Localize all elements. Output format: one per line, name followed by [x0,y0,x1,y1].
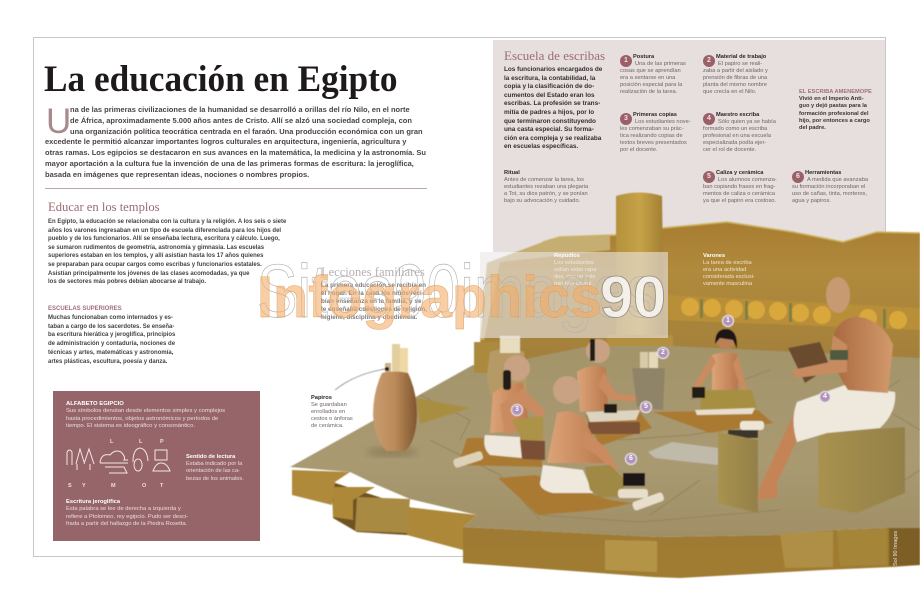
caption 3: primeras copias: tica realizando copias de [620,133,683,139]
text: escuela de escribas: mitía de padres a hijos, por lo [504,109,594,116]
intro text: na de las primeras civilizaciones de la humanidad se desarrolló a orillas del río Nilo, en el norte [70,105,410,114]
text: el escriba amenemope: guo y dejó pastas para la [799,103,867,109]
caption 3: primeras copias: Los estudiantes nove- [635,119,691,125]
text: lecciones familiares: le enseñaba cuestiones de religión, [321,306,427,313]
caption 2: material de trabajo [703,54,768,95]
basket [632,352,665,410]
caption: repudios: Los estudiantes [554,260,594,266]
text: el escriba amenemope: hijo, por entonces a cargo [799,118,870,124]
caption 3: primeras copias: 3 [624,115,628,122]
alfabeto intro: Sus símbolos denotan desde elementos simples y complejos [66,408,225,414]
caption 2: material de trabajo: planta del mismo nombre [703,82,767,88]
caption 1: postura: realización de la tarea. [620,89,677,95]
hieroglyph letters [68,439,164,489]
caption 4: maestro escriba: Sólo quien ya se había [718,119,776,125]
intro text [45,105,426,179]
caption 1: postura [620,54,686,95]
text: escuelas superiores: ESCUELAS SUPERIORES [48,306,122,312]
caption: repudios [554,253,596,287]
title: La educación en Egipto [44,58,398,100]
caption: papiros: Se guardaban [311,402,347,408]
caption 5: caliza y ceramica: 5 [707,173,711,180]
hieroglyphs [66,448,171,474]
caption 3: primeras copias: Primeras copias [633,112,677,118]
sentido de lectura: bezas de los animales. [186,476,244,482]
alfabeto intro: hasta procedimientos, objetos astronómicos y períodos de [66,416,218,422]
marker numbers: 2 [661,349,665,356]
caption 6: herramientas [792,170,868,204]
panel: alfabeto egipcio: M [111,483,116,489]
panel: alfabeto egipcio: L [139,439,142,445]
watermark panel [480,252,668,338]
mats [458,410,773,515]
caption 6: herramientas: agua y papiros. [792,198,831,204]
text: educar en los templos: años los varones ingresaban en un tipo de escuela diferenciada para los hijos del [48,228,281,234]
caption: repudios: solían estar rapa [554,267,596,273]
text: lecciones familiares: La primera educación se recibía en [321,282,426,289]
caption 2: material de trabajo: zaba a partir del aislado y [703,68,768,74]
caption 4: maestro escriba: profesional en una escuela [703,133,771,139]
caption 5: caliza y ceramica: Caliza y cerámica [716,170,763,176]
caption 2: material de trabajo: 2 [707,57,711,64]
text: el escriba amenemope: del padre. [799,125,826,131]
caption 2: material de trabajo: Material de trabajo [716,54,766,60]
caption: ritual: Antes de comenzar la tarea, los [504,177,584,183]
marker numbers: 3 [515,406,519,413]
text: escuelas superiores: técnicas y artes, matemáticas y astronomía, [48,350,173,356]
text: escuela de escribas: una casta especial. Su forma- [504,126,594,133]
panel: escuela de escribas [493,40,885,252]
sentido de lectura: Sentido de lectura [186,454,235,460]
marker numbers: 5 [644,403,648,410]
scribe 1 [690,329,757,415]
text: el escriba amenemope [799,89,872,131]
text: escuelas superiores: artes plásticas, escultura, poesía y danza. [48,359,167,365]
callout markers [512,316,830,464]
text: escuela de escribas: que terminaron constituyendo [504,118,596,125]
alfabeto intro [66,401,225,429]
caption: papiros: enrollados en [311,409,345,415]
escritura jeroglifica [66,499,188,527]
text: escuelas superiores [48,306,176,365]
caption: papiros [311,395,353,429]
panel: alfabeto egipcio: S [68,483,72,489]
caption 2: material de trabajo: El papiro se reali- [718,61,762,67]
escritura jeroglifica: Esta palabra se lee de derecha a izquierda y [66,506,181,512]
text: lecciones familiares: Lecciones familiares [321,265,425,279]
watermark: Infographics [257,265,602,330]
text: lecciones familiares: higiene, disciplina y obediencia. [321,314,417,321]
text: escuela de escribas [504,66,602,150]
text: educar en los templos: se preparaban para ocupar cargos como escribas y funcionarios estatales. [48,262,262,268]
caption 1: postura: Una de las primeras [635,61,686,67]
caption: repudios: Repudios [554,253,580,259]
caption 4: maestro escriba: especializada podía ejer- [703,140,766,146]
scribe 5 [577,339,640,434]
caption: varones: La tarea de escriba [703,260,752,266]
panel: alfabeto egipcio: O [142,483,146,489]
marker numbers: 1 [726,317,730,324]
text: escuela de escribas: escribas. La profesión se trans- [504,100,600,107]
caption: varones: vamente masculina [703,281,752,287]
caption 3: primeras copias: textos breves presentados [620,140,687,146]
text: escuelas superiores: Muchas funcionaban como internados y es- [48,315,173,321]
caption: papiros: cestos o ánforas [311,416,353,422]
caption: ritual: a Tot, su dios patrón, y se ponían [504,191,588,197]
text: escuelas superiores: ba escritura hierática y jeroglífica, principios [48,332,175,338]
intro text: una organización política teocrática centrada en el faraón. Una producción económica con un gran [70,127,423,136]
caption: varones: Varones [703,253,725,259]
intro text: de África, aproximadamente 5.000 años antes de Cristo. Allí se alzó una sociedad compleja, con [70,116,412,125]
text: escuela de escribas: cumentos del Estado eran los [504,92,595,99]
caption 4: maestro escriba [703,112,776,153]
text: el escriba amenemope: Vivió en el Imperio Anti- [799,96,863,102]
text: lecciones familiares [321,265,427,321]
marker numbers: 4 [823,393,827,400]
caption 3: primeras copias: por el docente. [620,147,658,153]
back wall [480,222,920,360]
caption: repudios: dos, con un solo [554,274,595,280]
heading: escuela de escribas: Escuela de escribas [504,48,605,63]
caption 5: caliza y ceramica: ban copiando frases en frag- [703,184,775,190]
caption 5: caliza y ceramica [703,170,777,204]
caption 6: herramientas: A medida que avanzaba [807,177,868,183]
low block and rear jar [474,336,527,412]
intro text: basada en imágenes que representan ideas, nociones o nombres propios. [45,170,309,179]
sentido de lectura: Estaba indicado por la [186,461,242,467]
caption: papiros: Papiros [311,395,332,401]
caption 5: caliza y ceramica: Los alumnos comenza- [718,177,777,183]
drop cap: U [46,102,71,141]
caption: ritual: bajo su advocación y cuidado. [504,198,580,204]
caption: repudios: mechón lateral. [554,281,593,287]
caption: papiros: de cerámica. [311,423,344,429]
panel: alfabeto egipcio: T [160,483,163,489]
caption 1: postura: Postura [633,54,654,60]
caption 6: herramientas: 6 [796,173,800,180]
text: escuela de escribas: Los funcionarios encargados de [504,66,602,73]
text: escuela de escribas: ción era compleja y se realizaba [504,135,601,142]
caption 1: postura: 1 [624,57,628,64]
text: educar en los templos: superiores estaban en los templos, y allí asistían hasta los 17 años quienes [48,253,263,259]
text: lecciones familiares: bían enseñanza en la familia, y se [321,298,421,305]
panel: alfabeto egipcio: P [160,439,164,445]
watermark: 90 [600,265,666,330]
caption 6: herramientas: uso de cañas, tinta, morteros, [792,191,867,197]
panel: alfabeto egipcio: L [110,439,113,445]
white cloth and scrolls [648,421,764,465]
sentido de lectura: orientación de las ca- [186,468,240,474]
caption 4: maestro escriba: formado como un escriba [703,126,767,132]
caption 5: caliza y ceramica: mentos de caliza o cerámica [703,191,775,197]
text: el escriba amenemope: EL ESCRIBA AMENEMOPE [799,89,872,95]
escritura jeroglifica: Escritura jeroglífica [66,499,120,505]
divider [45,188,427,189]
text: educar en los templos: Asistían principalmente los jóvenes de las clases acomodadas, ya que [48,271,249,277]
caption: ritual [504,170,588,204]
text: educar en los templos [48,218,286,285]
teacher on stone seat [757,277,905,513]
text: escuela de escribas: en escuelas específicas. [504,143,578,150]
caption: varones: era una actividad [703,267,746,273]
text: educar en los templos: pueblo y de los funcionarios. Allí se enseñaba lectura, escritura y cálculo. Luego, [48,236,280,242]
caption: ritual: estudiantes rezaban una plegaria [504,184,588,190]
caption 6: herramientas: su formación incorporaban el [792,184,865,190]
escritura jeroglifica: refiere a Ptolomeo, rey egipcio. Pudo ser desci- [66,514,188,520]
sentido de lectura [186,454,244,482]
caption 4: maestro escriba: 4 [707,115,711,122]
text: educar en los templos: se sumaron rudimentos de geometría, astronomía y gimnasia. Las escuelas [48,245,264,251]
scribe 6 [540,376,665,511]
caption 3: primeras copias [620,112,691,153]
caption 6: herramientas: Herramientas [805,170,841,176]
text: escuela de escribas: la escritura, la contabilidad, la [504,75,595,82]
caption 5: caliza y ceramica: ya que el papiro era costoso. [703,198,776,204]
small stone block [718,432,758,513]
image credit: Sol 90 Images [893,531,899,566]
jar with papyrus scrolls [366,344,418,456]
intro text: otras ramas. Los egipcios se destacaron en sus avances en la matemática, la medicina y la astronomía. Su [45,148,426,157]
text: educar en los templos: los de sectores más pobres debían abocarse al trabajo. [48,279,206,285]
caption: varones [703,253,755,287]
text: escuela de escribas: copia y la clasificación de do- [504,83,594,90]
scribe 3 [452,355,546,468]
text: el escriba amenemope: formación profesional del [799,111,869,117]
caption: varones: considerada exclusi- [703,274,755,280]
caption 4: maestro escriba: Maestro escriba [716,112,759,118]
column [607,192,673,348]
alfabeto intro: tiempo. El sistema es ideográfico y consonántico. [66,423,195,429]
marker numbers: 6 [629,455,633,462]
caption 2: material de trabajo: que crecía en el Nilo. [703,89,756,95]
text: escuelas superiores: taban a cargo de los sacerdotes. Se enseña- [48,324,174,330]
callout line: papiros [335,369,385,390]
caption 3: primeras copias: les comenzaban su prác- [620,126,684,132]
caption 4: maestro escriba: cer el rol de docente. [703,147,756,153]
caption 1: postura: era a sentarse en una [620,75,675,81]
caption 2: material de trabajo: prensión de fibras de una [703,75,767,81]
heading: educar en los templos: Educar en los templos [48,200,160,214]
caption: ritual: Ritual [504,170,520,176]
alfabeto intro: ALFABETO EGIPCIO [66,401,124,407]
text: escuelas superiores: de administración y contaduría, nociones de [48,341,175,347]
watermark: Sites90images [257,249,657,333]
escritura jeroglifica: frada a partir del hallazgo de la Piedra Rosetta. [66,521,187,527]
caption 1: postura: cosas que se aprendían [620,68,681,74]
text: lecciones familiares: el hogar. En la casa los niños reci- [321,290,424,297]
panel: alfabeto egipcio [53,391,260,541]
floor and base [290,346,920,578]
caption 1: postura: posición especial para la [620,82,682,88]
panel: alfabeto egipcio: Y [82,483,86,489]
text: educar en los templos: En Egipto, la educación se relacionaba con la cultura y la religión. A los seis o siete [48,219,286,225]
intro text: mayor aportación a la cultura fue la invención de una de las primeras formas de escritura: la jeroglífica, [45,159,414,168]
intro text: excedente le permitió alcanzar importantes logros culturales en arquitectura, ingeniería, agricultura y [45,137,406,146]
